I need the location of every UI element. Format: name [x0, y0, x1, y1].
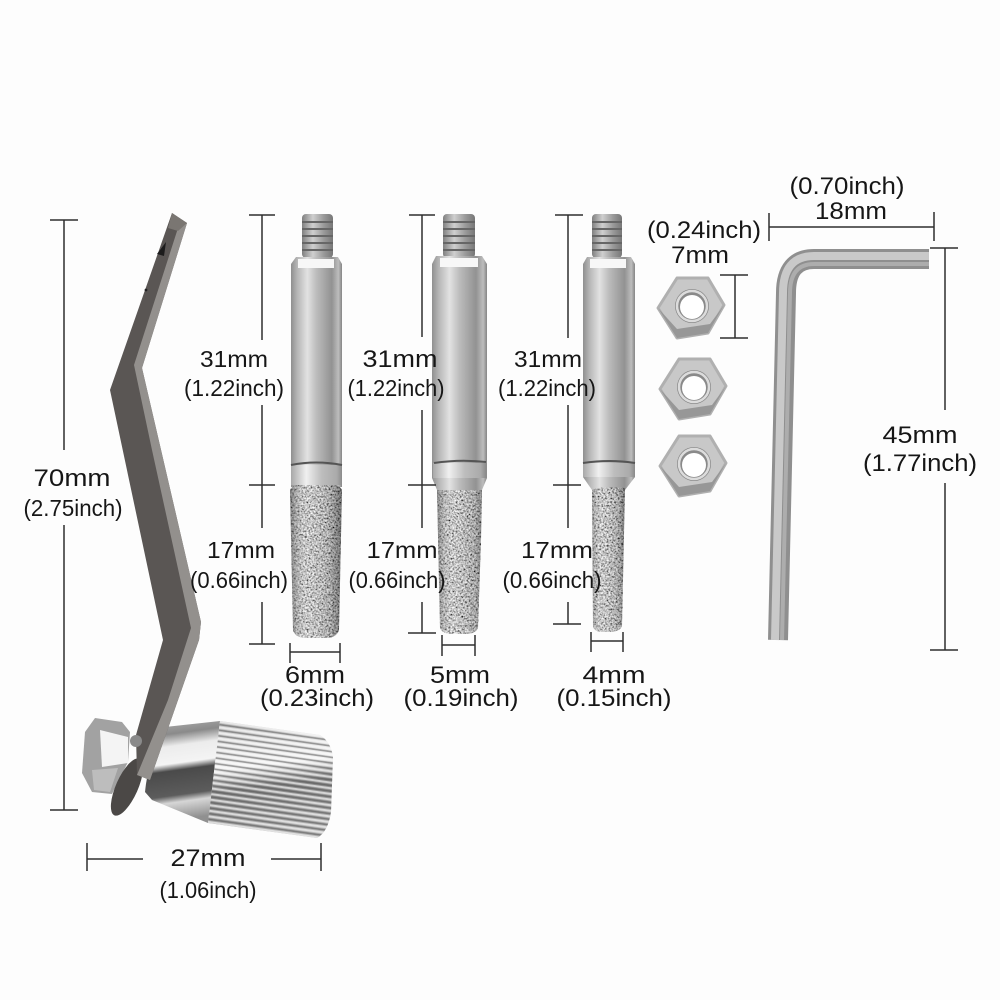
label shaft inch: (1.22inch) [348, 375, 444, 401]
label diameter inch: (0.15inch) [556, 685, 672, 712]
label diameter inch: (0.23inch) [260, 685, 374, 712]
dimension: bit 5mm [348, 215, 518, 712]
dimension: lever height [24, 220, 122, 810]
shaft [583, 257, 635, 490]
label: 45mm [882, 422, 958, 449]
dimension: nut width [647, 217, 761, 338]
label shaft inch: (1.22inch) [184, 375, 284, 401]
hex key [775, 256, 929, 640]
label shaft: 31mm [200, 346, 268, 372]
dimension: hex key width [769, 173, 934, 241]
diamond bit 5mm [432, 214, 488, 641]
label shaft inch: (1.22inch) [498, 375, 596, 401]
label: 7mm [671, 242, 729, 269]
label tip inch: (0.66inch) [502, 567, 602, 593]
label inch: (1.06inch) [160, 877, 256, 903]
bent lever with knob and bolt [82, 213, 333, 838]
nut 3 [660, 436, 726, 496]
diamond bit 6mm [288, 214, 344, 642]
label: 70mm [34, 465, 110, 492]
label inch: (0.70inch) [790, 173, 904, 200]
bolt head [82, 718, 130, 794]
diamond bit 4mm [583, 214, 635, 638]
grit tip [437, 490, 482, 634]
label shaft: 31mm [514, 346, 582, 372]
thread [592, 214, 622, 258]
label: 27mm [170, 845, 246, 872]
hex nuts [658, 278, 726, 496]
label diameter: 4mm [582, 662, 646, 689]
thread [302, 214, 333, 258]
lever arm [110, 213, 201, 780]
dimension: bit 4mm [498, 215, 672, 712]
label diameter inch: (0.19inch) [404, 685, 518, 712]
label shaft: 31mm [362, 346, 438, 373]
grit tip [290, 485, 342, 638]
label tip: 17mm [207, 537, 275, 563]
label tip inch: (0.66inch) [190, 567, 288, 593]
grit tip [592, 487, 625, 632]
nut 1 [658, 278, 724, 338]
label diameter: 6mm [285, 662, 345, 689]
label inch: (0.24inch) [647, 217, 761, 244]
shaft [432, 256, 487, 490]
dimension: bit 6mm [184, 215, 374, 712]
dimension: lever width [87, 843, 321, 903]
label tip: 17mm [521, 537, 593, 563]
label: 18mm [815, 198, 887, 225]
knob cone [145, 721, 220, 823]
knurled knob [208, 721, 333, 838]
label tip inch: (0.66inch) [348, 567, 446, 593]
label tip: 17mm [366, 537, 438, 563]
thread [443, 214, 475, 258]
shaft [291, 257, 342, 487]
label inch: (2.75inch) [24, 495, 122, 521]
label inch: (1.77inch) [863, 450, 977, 477]
dimension: hex key height [863, 248, 977, 650]
washer [104, 754, 150, 820]
nut 2 [660, 359, 726, 419]
label diameter: 5mm [430, 662, 490, 689]
